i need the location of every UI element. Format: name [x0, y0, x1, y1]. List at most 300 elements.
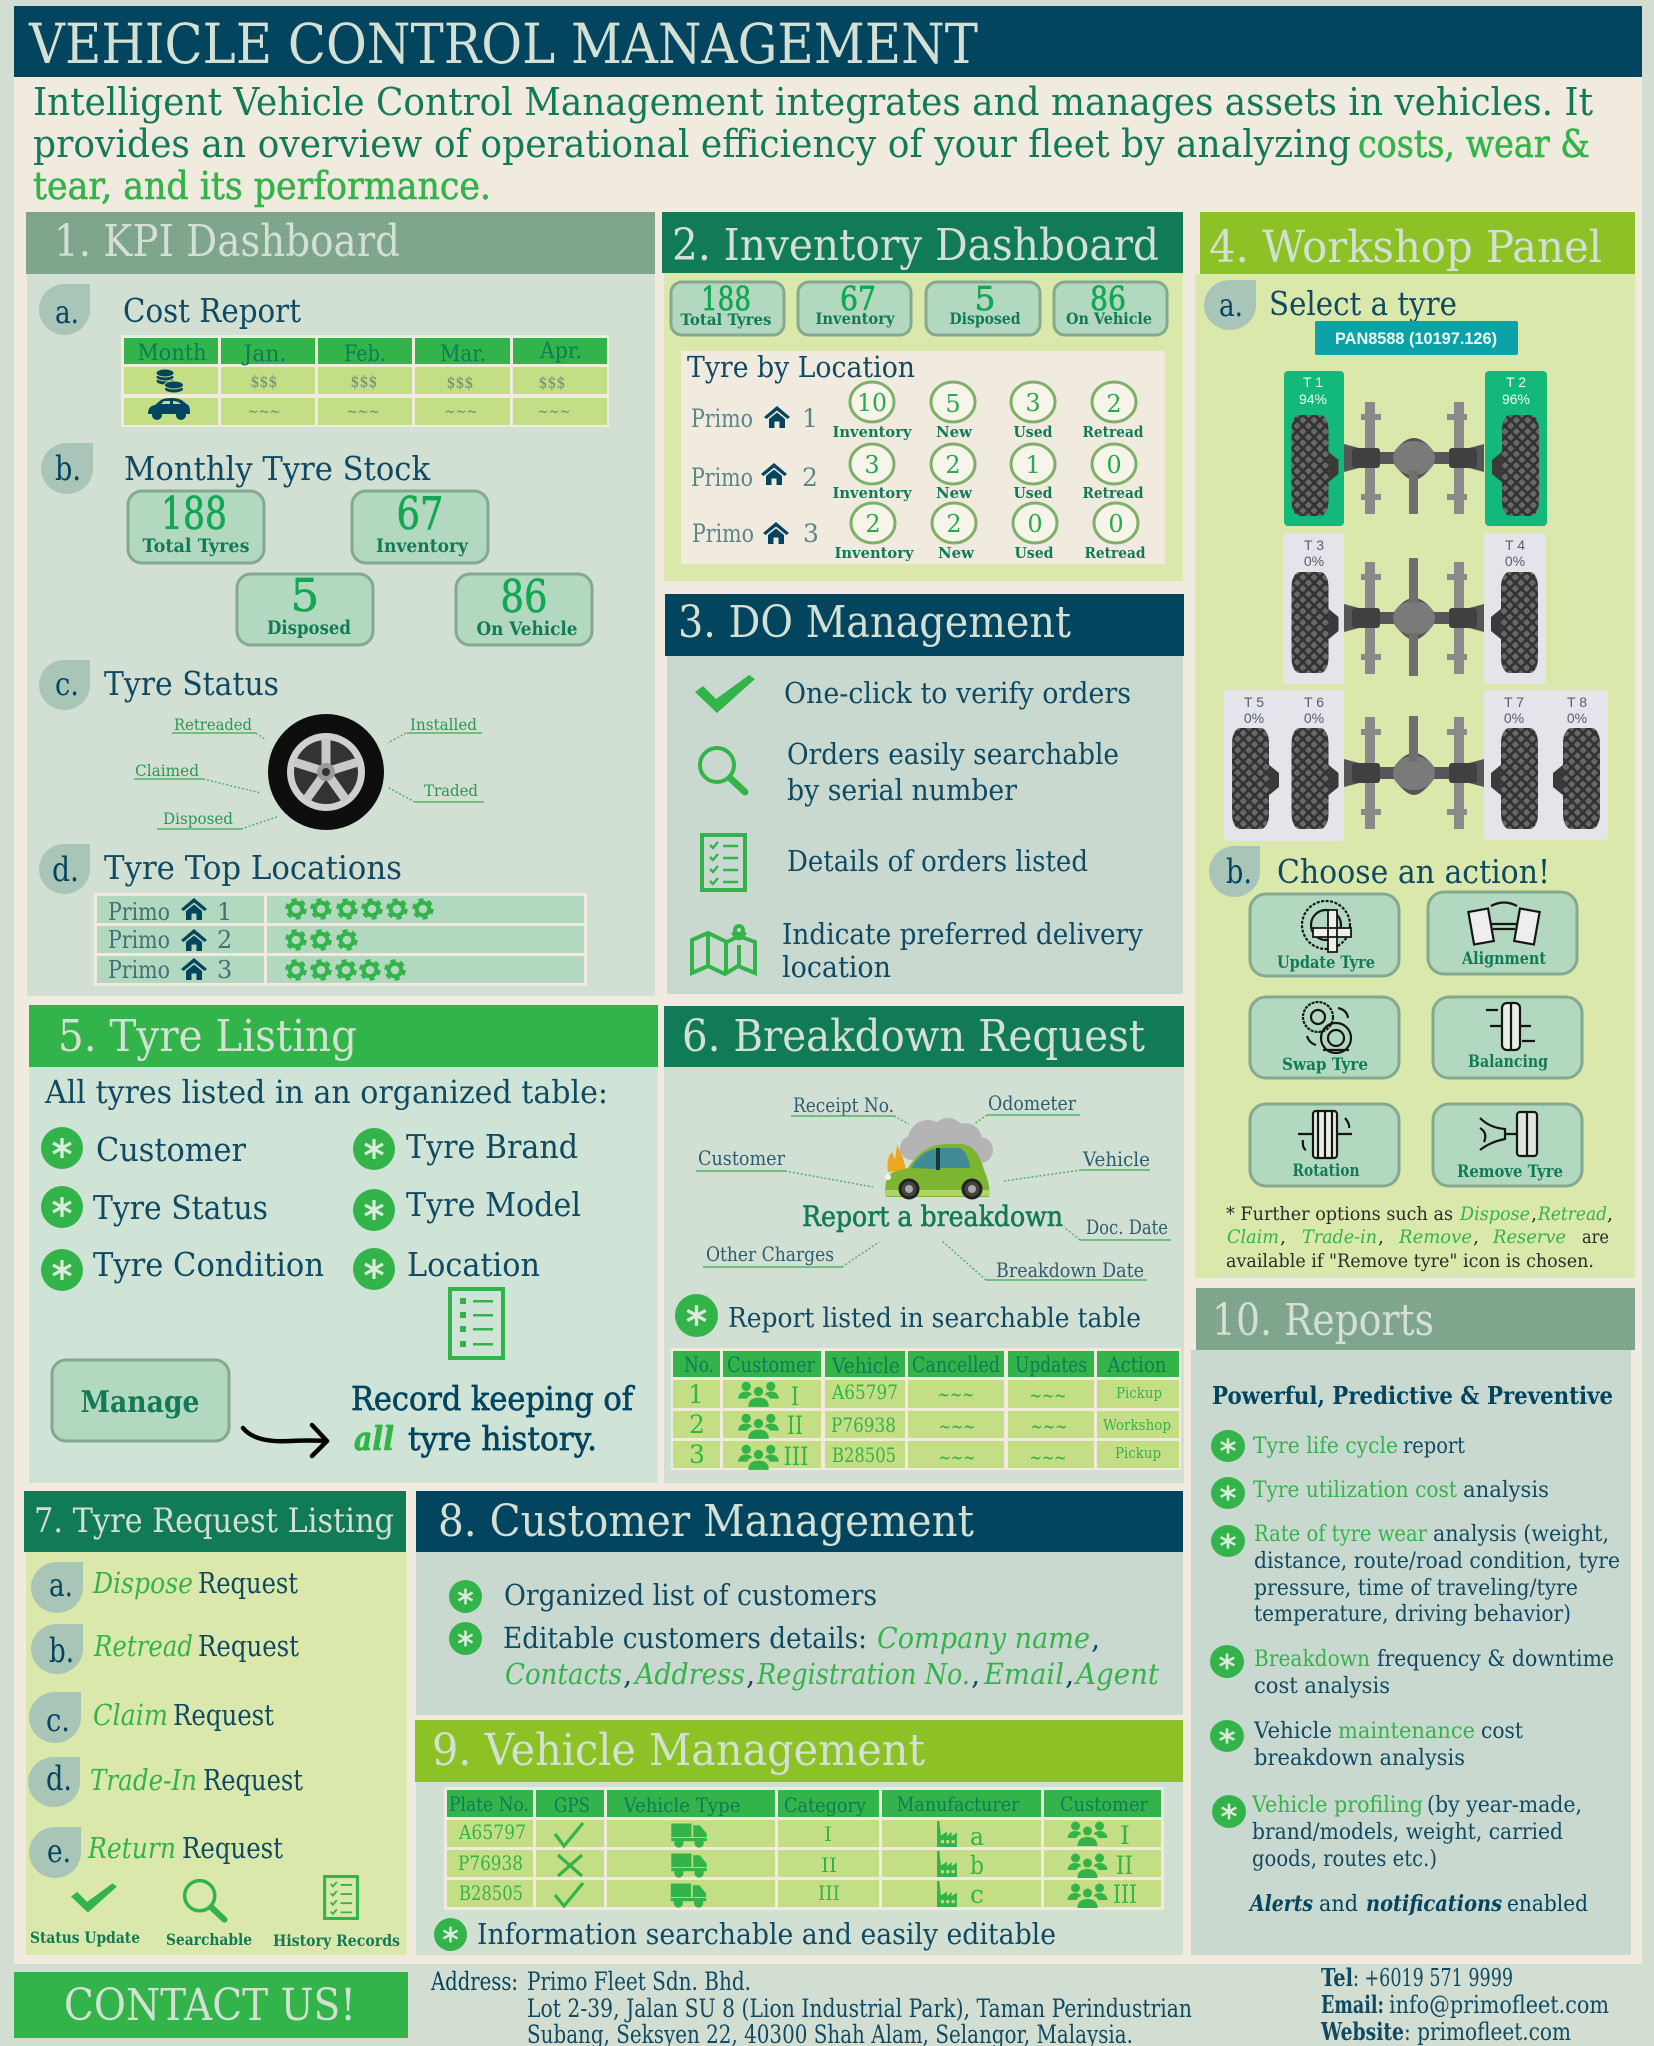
- stat cards: [671, 279, 1167, 335]
- tyre by location: Primo: [692, 519, 754, 548]
- axle diagram: T 4: [1505, 537, 1525, 553]
- further options note: Claim: [1227, 1226, 1279, 1248]
- customer bullets: Contacts: [505, 1657, 622, 1691]
- axle diagram: T 5: [1244, 694, 1264, 710]
- bullet list: [41, 1127, 581, 1291]
- request c: [29, 1692, 274, 1743]
- customer bullets: Editable customers details:: [503, 1621, 867, 1655]
- tyre by location: 5: [945, 390, 961, 418]
- cost report table: ~~~: [346, 402, 380, 421]
- icon: list: [450, 1289, 503, 1358]
- tyre by location: 2: [1106, 390, 1122, 418]
- button: balancing: [1433, 997, 1582, 1078]
- breakdown table: Customer: [727, 1353, 816, 1377]
- tyre top locations table: 2: [217, 926, 232, 954]
- tyre by location: 2: [865, 510, 881, 538]
- axle diagram: [1224, 371, 1608, 841]
- tyre status labels: [134, 715, 484, 829]
- bullet list: Location: [407, 1245, 540, 1284]
- contact us banner: CONTACT US!: [64, 1980, 356, 2031]
- vehicle id pill: PAN8588 (10197.126): [1335, 329, 1497, 348]
- customer bullets: Address: [632, 1657, 745, 1691]
- tyre top locations table: Primo: [108, 926, 170, 954]
- stat cards: 188: [701, 279, 751, 318]
- request d: [28, 1757, 303, 1807]
- contact details: : +6019 571 9999: [1353, 1964, 1513, 1992]
- vehicle table: A65797: [458, 1820, 526, 1844]
- button: swap tyre: Swap Tyre: [1282, 1055, 1368, 1075]
- request e: Return: [87, 1831, 176, 1865]
- intro line: All tyres listed in an organized table:: [44, 1073, 608, 1111]
- b: monthly tyre stock heading: Monthly Tyre Stock: [124, 449, 431, 488]
- alerts line: Alerts: [1248, 1891, 1313, 1917]
- report bullets: Vehicle profiling: [1251, 1792, 1423, 1818]
- customer bullets: ,: [971, 1657, 980, 1691]
- vehicle id pill: [1315, 321, 1518, 355]
- breakdown table: ~~~: [938, 1445, 976, 1469]
- report bullets: distance, route/road condition, tyre: [1254, 1548, 1620, 1574]
- further options note: ,: [1378, 1226, 1384, 1248]
- button: rotation: Rotation: [1292, 1161, 1360, 1181]
- c: tyre status heading: c.: [55, 665, 79, 703]
- history records feature: History Records: [273, 1931, 400, 1950]
- a: select a tyre: Select a tyre: [1269, 284, 1457, 323]
- icon: coins: [156, 369, 184, 393]
- stat cards: 67: [840, 279, 876, 318]
- cost report table: Mar.: [440, 342, 486, 367]
- panel: 2 Inventory Dashboard: 2. Inventory Dashboard: [672, 220, 1159, 271]
- report bullets: analysis: [1463, 1477, 1549, 1503]
- breakdown table: Updates: [1015, 1353, 1087, 1377]
- tyre by location: Used: [1014, 544, 1054, 562]
- panel: 8 Customer Management: 8. Customer Management: [438, 1496, 974, 1547]
- bullet list: Tyre Condition: [93, 1245, 324, 1284]
- panel: 5 Tyre Listing: 5. Tyre Listing: [58, 1011, 357, 1062]
- tyre by location: [681, 350, 1165, 564]
- breakdown table: B28505: [832, 1443, 896, 1467]
- vehicle table: I: [824, 1822, 832, 1846]
- a: select a tyre: [1204, 280, 1457, 330]
- button: alignment: Alignment: [1461, 949, 1546, 969]
- cost report table: Apr.: [539, 339, 582, 364]
- breakdown table: [671, 1348, 1181, 1471]
- title banner: VEHICLE CONTROL MANAGEMENT: [28, 12, 978, 76]
- tyre by location: New: [936, 423, 973, 441]
- panel: 9 Vehicle Management: [415, 1720, 1183, 1955]
- report bullets: report: [1403, 1433, 1465, 1459]
- report bullets: analysis (weight,: [1433, 1521, 1609, 1547]
- icon: tyre: [268, 714, 384, 830]
- contact details: Email:: [1321, 1990, 1384, 2019]
- a: cost report heading: Cost Report: [123, 291, 301, 330]
- tyre by location: Used: [1014, 484, 1053, 502]
- report bullets: cost: [1481, 1718, 1523, 1744]
- stat cards: Inventory: [816, 309, 895, 328]
- customer bullets: ,: [746, 1657, 755, 1691]
- panel: 7 Tyre Request Listing: [24, 1491, 407, 1955]
- further options note: Trade-in: [1302, 1226, 1377, 1248]
- breakdown table: Workshop: [1103, 1416, 1171, 1434]
- request b: [31, 1624, 299, 1674]
- request b: Retread: [93, 1629, 193, 1663]
- panel: 3 DO Management: 3. DO Management: [678, 597, 1071, 648]
- request a: [31, 1562, 298, 1613]
- alerts line: enabled: [1507, 1891, 1588, 1917]
- b: choose an action: b.: [1226, 852, 1252, 892]
- request b: b.: [49, 1631, 74, 1671]
- tyre top locations table: Primo: [108, 956, 170, 984]
- tyre by location: 3: [1025, 389, 1041, 417]
- tyre status labels: Claimed: [135, 761, 199, 780]
- cost report table: Month: [138, 341, 206, 366]
- further options note: Reserve: [1492, 1226, 1566, 1248]
- request e: [29, 1827, 283, 1878]
- breakdown field labels: Odometer: [988, 1091, 1076, 1115]
- report bullets: (by year-made,: [1427, 1792, 1582, 1818]
- icon: broken down car: [885, 1118, 993, 1198]
- report listed line: [675, 1294, 1141, 1337]
- c: tyre status heading: [39, 660, 279, 710]
- further options note: are: [1582, 1226, 1609, 1248]
- tyre status labels: Installed: [410, 715, 477, 734]
- axle diagram: 0%: [1504, 710, 1524, 726]
- tyre by location: Tyre by Location: [687, 350, 915, 384]
- breakdown table: 1: [688, 1380, 704, 1409]
- report bullets: temperature, driving behavior): [1254, 1601, 1571, 1627]
- vehicle table: GPS: [554, 1793, 590, 1817]
- bullet list: Tyre Brand: [406, 1127, 578, 1166]
- further options note: ,: [1473, 1226, 1479, 1248]
- axle diagram: 96%: [1502, 391, 1530, 407]
- record keeping text: [351, 1379, 636, 1458]
- tyre top locations table: 1: [217, 898, 232, 926]
- axle diagram: 0%: [1304, 710, 1324, 726]
- panel: 3 DO Management: [665, 594, 1184, 994]
- searchable text: Orders easily searchable: [787, 737, 1119, 771]
- axle diagram: 0%: [1304, 553, 1324, 569]
- vehicle table: a: [970, 1822, 984, 1851]
- stat: inventory: [352, 487, 488, 563]
- cost report table: $$$: [250, 372, 278, 391]
- request c: c.: [46, 1701, 70, 1739]
- breakdown table: 2: [689, 1410, 705, 1439]
- tyre by location: 1: [1025, 451, 1041, 479]
- stat: total tyres: Total Tyres: [142, 535, 250, 557]
- intro text: tear, and its performance.: [33, 164, 491, 208]
- status update feature: Status Update: [30, 1928, 140, 1947]
- report bullets: Rate of tyre wear: [1254, 1521, 1427, 1547]
- history records feature: [273, 1877, 400, 1950]
- panel: 5 Tyre Listing: [29, 1005, 658, 1483]
- tyre by location: 10: [857, 389, 887, 417]
- reports subtitle: Powerful, Predictive & Preventive: [1212, 1381, 1613, 1410]
- stat: inventory: Inventory: [376, 535, 469, 557]
- manage button: Manage: [80, 1385, 200, 1420]
- breakdown table: II: [787, 1411, 803, 1440]
- bullet list: Customer: [96, 1130, 246, 1169]
- cost report table: ~~~: [444, 402, 478, 421]
- searchable text: [787, 737, 1119, 807]
- alerts line: and: [1319, 1891, 1358, 1917]
- report bullets: [1210, 1430, 1620, 1872]
- cost report table: $$$: [538, 373, 566, 392]
- request e: e.: [47, 1832, 71, 1870]
- tyre by location: 0: [1027, 510, 1043, 538]
- stat: inventory: 67: [396, 487, 444, 540]
- breakdown table: ~~~: [938, 1382, 974, 1406]
- request a: Dispose: [92, 1566, 193, 1600]
- customer bullets: ,: [1091, 1621, 1100, 1655]
- axle diagram: 0%: [1244, 710, 1264, 726]
- vehicle table: II: [821, 1853, 837, 1877]
- record keeping text: Record keeping of: [351, 1379, 636, 1418]
- breakdown table: Vehicle: [831, 1354, 900, 1378]
- vehicle table: b: [970, 1851, 984, 1880]
- contact details: info@primofleet.com: [1389, 1991, 1609, 2019]
- report bullets: cost analysis: [1254, 1673, 1390, 1699]
- panel: 8 Customer Management: [416, 1491, 1183, 1715]
- intro text: provides an overview of operational efficiency of your fleet by analyzing: [33, 122, 1351, 166]
- tyre by location: Retread: [1084, 544, 1146, 562]
- request e: Request: [182, 1831, 283, 1865]
- tyre by location: 3: [803, 519, 819, 548]
- alerts line: notifications: [1366, 1891, 1502, 1917]
- further options note: ,: [1280, 1226, 1286, 1248]
- delivery text: location: [782, 950, 891, 984]
- vehicle table: Customer: [1060, 1792, 1148, 1816]
- request d: d.: [46, 1759, 72, 1799]
- vehicle table: P76938: [458, 1851, 523, 1875]
- report a breakdown title: Report a breakdown: [802, 1200, 1063, 1233]
- vehicle table: [444, 1787, 1164, 1910]
- a: cost report heading: a.: [55, 293, 79, 331]
- report bullets: breakdown analysis: [1254, 1745, 1465, 1771]
- axle diagram: T 6: [1304, 694, 1324, 710]
- d: tyre top locations heading: d.: [52, 850, 79, 890]
- panel: 10 Reports: [1191, 1288, 1635, 1955]
- further options note: ,: [1531, 1203, 1537, 1225]
- further options note: available if "Remove tyre" icon is chosen.: [1226, 1250, 1594, 1272]
- customer bullets: Registration No.: [756, 1657, 970, 1691]
- button: update tyre: [1250, 894, 1399, 976]
- button: balancing: Balancing: [1468, 1052, 1548, 1072]
- panel: 6 Breakdown Request: [664, 1006, 1184, 1483]
- address: Lot 2-39, Jalan SU 8 (Lion Industrial Park), Taman Perindustrian: [527, 1994, 1192, 2023]
- stat: disposed: 5: [291, 569, 319, 622]
- vehicle table: Manufacturer: [896, 1792, 1020, 1816]
- a: cost report heading: [39, 284, 301, 335]
- tyre by location: Primo: [691, 463, 753, 492]
- report bullets: maintenance: [1338, 1718, 1475, 1744]
- axle diagram: T 3: [1304, 537, 1324, 553]
- searchable feature: [166, 1881, 252, 1949]
- breakdown table: ~~~: [1030, 1383, 1066, 1407]
- tyre status labels: Traded: [424, 781, 478, 800]
- panel: 9 Vehicle Management: 9. Vehicle Management: [432, 1725, 925, 1776]
- tyre top locations table: [94, 893, 587, 986]
- axle diagram: T 2: [1506, 374, 1526, 390]
- axle diagram: T 1: [1303, 374, 1323, 390]
- vehicle table: III: [1113, 1880, 1137, 1909]
- panel: 10 Reports: 10. Reports: [1212, 1295, 1434, 1346]
- tyre by location: 0: [1106, 451, 1122, 479]
- record keeping text: tyre history.: [408, 1419, 597, 1458]
- breakdown table: A65797: [831, 1380, 898, 1404]
- report bullets: brand/models, weight, carried: [1252, 1819, 1563, 1845]
- tyre by location: 2: [802, 463, 818, 492]
- report bullets: pressure, time of traveling/tyre: [1254, 1575, 1578, 1601]
- customer bullets: Company name: [877, 1621, 1090, 1655]
- stat: disposed: [237, 569, 373, 645]
- intro text: costs, wear &: [1358, 122, 1590, 166]
- breakdown table: I: [791, 1382, 799, 1411]
- button: remove tyre: [1433, 1104, 1582, 1186]
- axle diagram: 94%: [1299, 391, 1327, 407]
- status update feature: [30, 1883, 140, 1947]
- icon: check: [695, 675, 755, 713]
- report bullets: Vehicle: [1253, 1718, 1332, 1744]
- vehicle table: Category: [784, 1793, 867, 1817]
- cost report table: $$$: [350, 372, 378, 391]
- request c: Request: [173, 1698, 274, 1732]
- report listed line: Report listed in searchable table: [728, 1303, 1141, 1334]
- contact details: : primofleet.com: [1404, 2018, 1571, 2046]
- manage button: [52, 1360, 229, 1441]
- customer bullets: [449, 1578, 1159, 1691]
- tyre status labels: Retreaded: [174, 715, 252, 734]
- stat: total tyres: 188: [161, 487, 227, 540]
- tyre by location: Inventory: [832, 484, 913, 502]
- stat cards: Total Tyres: [680, 310, 772, 329]
- panel: 4 Workshop Panel: 4. Workshop Panel: [1209, 222, 1602, 273]
- further options note: [1226, 1203, 1613, 1272]
- panel: 4 Workshop Panel: [1195, 212, 1635, 1278]
- breakdown table: Pickup: [1116, 1384, 1162, 1402]
- intro text: [33, 80, 1593, 208]
- verify text: One-click to verify orders: [784, 676, 1131, 710]
- button: swap tyre: [1250, 997, 1399, 1078]
- vehicle table: Plate No.: [449, 1792, 529, 1816]
- alerts line: [1248, 1891, 1588, 1917]
- breakdown table: Cancelled: [912, 1353, 1000, 1377]
- tyre top locations table: Primo: [108, 898, 170, 926]
- bullet list: Tyre Status: [93, 1188, 268, 1227]
- panel: 2 Inventory Dashboard: [662, 212, 1183, 581]
- panel: 1 KPI Dashboard: 1. KPI Dashboard: [54, 216, 400, 267]
- breakdown table: ~~~: [1030, 1414, 1068, 1438]
- icon: search: [700, 748, 745, 792]
- vehicle table: Vehicle Type: [623, 1793, 740, 1817]
- tyre by location: 2: [946, 510, 962, 538]
- axle diagram: T 7: [1504, 694, 1524, 710]
- breakdown table: III: [784, 1442, 808, 1471]
- request d: Request: [203, 1763, 303, 1797]
- tyre by location: 0: [1108, 510, 1124, 538]
- record keeping text: all: [354, 1419, 394, 1458]
- a: select a tyre: a.: [1219, 286, 1243, 324]
- tyre top locations table: 3: [217, 956, 232, 984]
- cost report table: Jan.: [242, 342, 286, 367]
- stat cards: On Vehicle: [1066, 309, 1152, 328]
- stat: total tyres: [128, 487, 264, 563]
- tyre by location: New: [936, 484, 973, 502]
- button: rotation: [1250, 1104, 1399, 1186]
- tyre by location: Used: [1014, 423, 1053, 441]
- further options note: * Further options such as: [1226, 1203, 1453, 1225]
- delivery text: [782, 917, 1144, 984]
- searchable feature: Searchable: [166, 1930, 252, 1949]
- customer bullets: Agent: [1073, 1657, 1159, 1691]
- tyre by location: Primo: [691, 404, 753, 433]
- title banner: [14, 6, 1642, 77]
- stat cards: 5: [974, 279, 996, 318]
- icon: map: [692, 926, 755, 974]
- breakdown field labels: Vehicle: [1082, 1147, 1150, 1171]
- further options note: Dispose: [1459, 1203, 1530, 1225]
- breakdown table: Action: [1107, 1353, 1166, 1377]
- stat: on vehicle: 86: [500, 570, 548, 623]
- tyre by location: 1: [802, 404, 818, 433]
- tyre by location: 2: [945, 451, 961, 479]
- tyre status labels: Disposed: [163, 809, 233, 828]
- b: monthly tyre stock heading: [41, 443, 431, 494]
- tyre by location: New: [938, 544, 975, 562]
- stat: disposed: Disposed: [267, 617, 351, 639]
- stat: on vehicle: [456, 570, 592, 645]
- request b: Request: [198, 1629, 299, 1663]
- b: choose an action: [1209, 846, 1550, 897]
- breakdown field labels: Breakdown Date: [996, 1258, 1144, 1282]
- vehicle table: B28505: [459, 1881, 523, 1905]
- icon: checklist: [702, 835, 745, 890]
- axle diagram: 0%: [1567, 710, 1587, 726]
- vehicle table: III: [818, 1881, 840, 1905]
- tyre by location: Inventory: [834, 544, 915, 562]
- breakdown field labels: Doc. Date: [1086, 1215, 1168, 1239]
- stat cards: 86: [1090, 279, 1126, 318]
- address: Primo Fleet Sdn. Bhd.: [527, 1967, 751, 1996]
- contact details: Tel: [1321, 1963, 1353, 1992]
- further options note: Remove: [1398, 1226, 1472, 1248]
- request a: a.: [49, 1566, 73, 1604]
- intro text: Intelligent Vehicle Control Management integrates and manages assets in vehicles. It: [33, 80, 1593, 124]
- contact details: Website: [1320, 2017, 1404, 2046]
- report bullets: goods, routes etc.): [1252, 1846, 1437, 1872]
- button: alignment: [1428, 892, 1577, 974]
- customer bullets: ,: [623, 1657, 632, 1691]
- further options note: ,: [1607, 1203, 1613, 1225]
- tyre by location: Retread: [1082, 484, 1144, 502]
- request d: Trade-In: [90, 1763, 197, 1797]
- report bullets: Tyre utilization cost: [1253, 1477, 1457, 1503]
- axle diagram: 0%: [1505, 553, 1525, 569]
- breakdown field labels: Customer: [698, 1146, 785, 1170]
- address: [430, 1967, 1192, 2046]
- d: tyre top locations heading: Tyre Top Locations: [104, 848, 402, 887]
- tyre by location: Inventory: [832, 423, 913, 441]
- d: tyre top locations heading: [39, 844, 402, 894]
- request a: Request: [198, 1566, 298, 1600]
- button: update tyre: Update Tyre: [1277, 953, 1375, 973]
- further options note: Retread: [1537, 1203, 1607, 1225]
- panel: 6 Breakdown Request: 6. Breakdown Request: [682, 1011, 1145, 1062]
- footer band: [0, 1964, 1654, 2046]
- icon: car: [148, 398, 190, 414]
- cost report table: ~~~: [538, 402, 570, 421]
- vehicle table: I: [1120, 1821, 1130, 1850]
- cost report table: $$$: [446, 373, 474, 392]
- breakdown table: Pickup: [1115, 1444, 1161, 1462]
